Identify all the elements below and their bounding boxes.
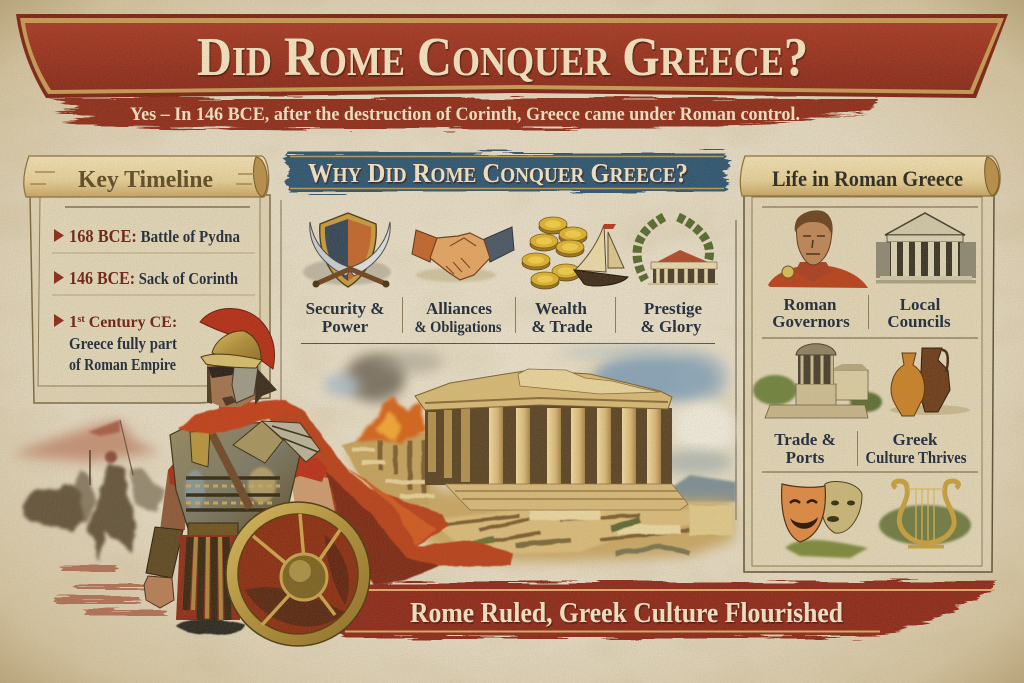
reason labels: Alliances — [426, 299, 492, 318]
left colonnade — [428, 408, 470, 482]
reason labels: Wealth — [535, 299, 588, 318]
icon: theatre masks — [782, 481, 868, 558]
labels: trade and culture: Culture Thrives — [866, 448, 967, 467]
timeline item 1st century CE: of Roman Empire — [69, 355, 176, 374]
closing banner — [340, 582, 996, 638]
rubble ground — [345, 448, 733, 562]
timeline item 1st century CE: Greece fully part — [69, 334, 177, 353]
tunic sleeves — [168, 457, 327, 490]
icon: roman governor — [768, 210, 868, 288]
cape — [262, 400, 512, 585]
icon: shield and crossed swords — [303, 213, 391, 288]
labels: governors and councils — [772, 295, 951, 331]
panel: why did rome conquer greece — [281, 153, 736, 520]
labels: governors and councils: Local — [900, 295, 941, 314]
closing banner text: Rome Ruled, Greek Culture Flourished — [410, 598, 843, 629]
temple — [415, 369, 688, 510]
scroll header — [24, 156, 269, 197]
scroll body — [30, 195, 270, 403]
temple interior — [425, 403, 672, 485]
banner shape — [16, 14, 1008, 98]
front columns — [489, 405, 661, 486]
left ruined wall — [342, 433, 435, 505]
steps — [445, 484, 688, 510]
labels: governors and councils: Roman — [784, 295, 837, 314]
icon: laurel and temple — [637, 217, 718, 285]
timeline item 1st century CE: Century CE: — [85, 314, 177, 331]
timeline item 1st century CE: st — [78, 314, 85, 325]
painting: ruined parthenon — [324, 346, 736, 562]
crest — [200, 308, 275, 369]
armor — [170, 421, 320, 537]
labels: trade and culture: Ports — [786, 448, 825, 467]
left arm — [144, 470, 188, 608]
panel frame — [744, 193, 994, 572]
panel: life in roman greece — [740, 156, 1000, 572]
labels: governors and councils: Governors — [772, 312, 850, 331]
scroll header: Key Timeline — [78, 167, 213, 193]
reason labels: Prestige — [644, 299, 703, 318]
timeline item 146 BCE: 146 BCE: Sack of Corinth — [69, 268, 238, 288]
icon: greek vases — [890, 348, 970, 416]
labels: trade and culture: Trade & — [774, 430, 836, 449]
section heading banner: WHY DID ROME CONQUER GREECE? — [308, 158, 688, 188]
title banner — [16, 14, 1008, 129]
labels: trade and culture — [774, 430, 967, 467]
section heading banner — [284, 153, 730, 192]
icon: local council temple — [876, 213, 976, 284]
cavalry silhouettes — [10, 420, 165, 560]
red hill and banner — [10, 420, 160, 462]
labels: governors and councils: Councils — [887, 312, 951, 331]
title text: DID ROME CONQUER GREECE? — [197, 26, 808, 87]
panel header: Life in Roman Greece — [772, 166, 963, 191]
fire and smoke — [358, 396, 425, 442]
subtitle text: Yes – In 146 BCE, after the destruction of Corinth, Greece came under Roman control. — [130, 105, 800, 125]
panel: key timeline — [24, 156, 270, 403]
labels: trade and culture: Greek — [892, 430, 938, 449]
reason labels: Security & — [306, 299, 384, 318]
soldier — [144, 308, 512, 646]
helmet and head — [201, 331, 277, 407]
right arm — [290, 472, 335, 512]
icon: handshake — [412, 227, 514, 282]
reason labels: & Trade — [531, 317, 593, 336]
icon: lyre — [879, 481, 971, 548]
reason labels — [301, 297, 715, 344]
reason labels: Power — [322, 317, 369, 336]
round shield — [226, 502, 370, 646]
timeline item 1st century CE — [54, 312, 177, 374]
reason labels: & Glory — [641, 317, 702, 336]
timeline item 168 BCE: 168 BCE: Battle of Pydna — [69, 226, 240, 246]
timeline item 1st century CE: 1 — [69, 312, 78, 331]
entablature — [415, 370, 672, 410]
sky — [324, 346, 736, 502]
panel header — [740, 156, 1000, 196]
neck and scarf — [178, 398, 300, 434]
skirt of leather strips — [175, 535, 245, 634]
icon: round building and port — [753, 344, 882, 418]
banner subtitle brush stroke — [50, 98, 880, 129]
reason labels: & Obligations — [414, 319, 502, 336]
closing banner shape — [340, 582, 996, 638]
left brush strokes — [55, 565, 165, 615]
icon: coins and ship — [522, 217, 628, 289]
